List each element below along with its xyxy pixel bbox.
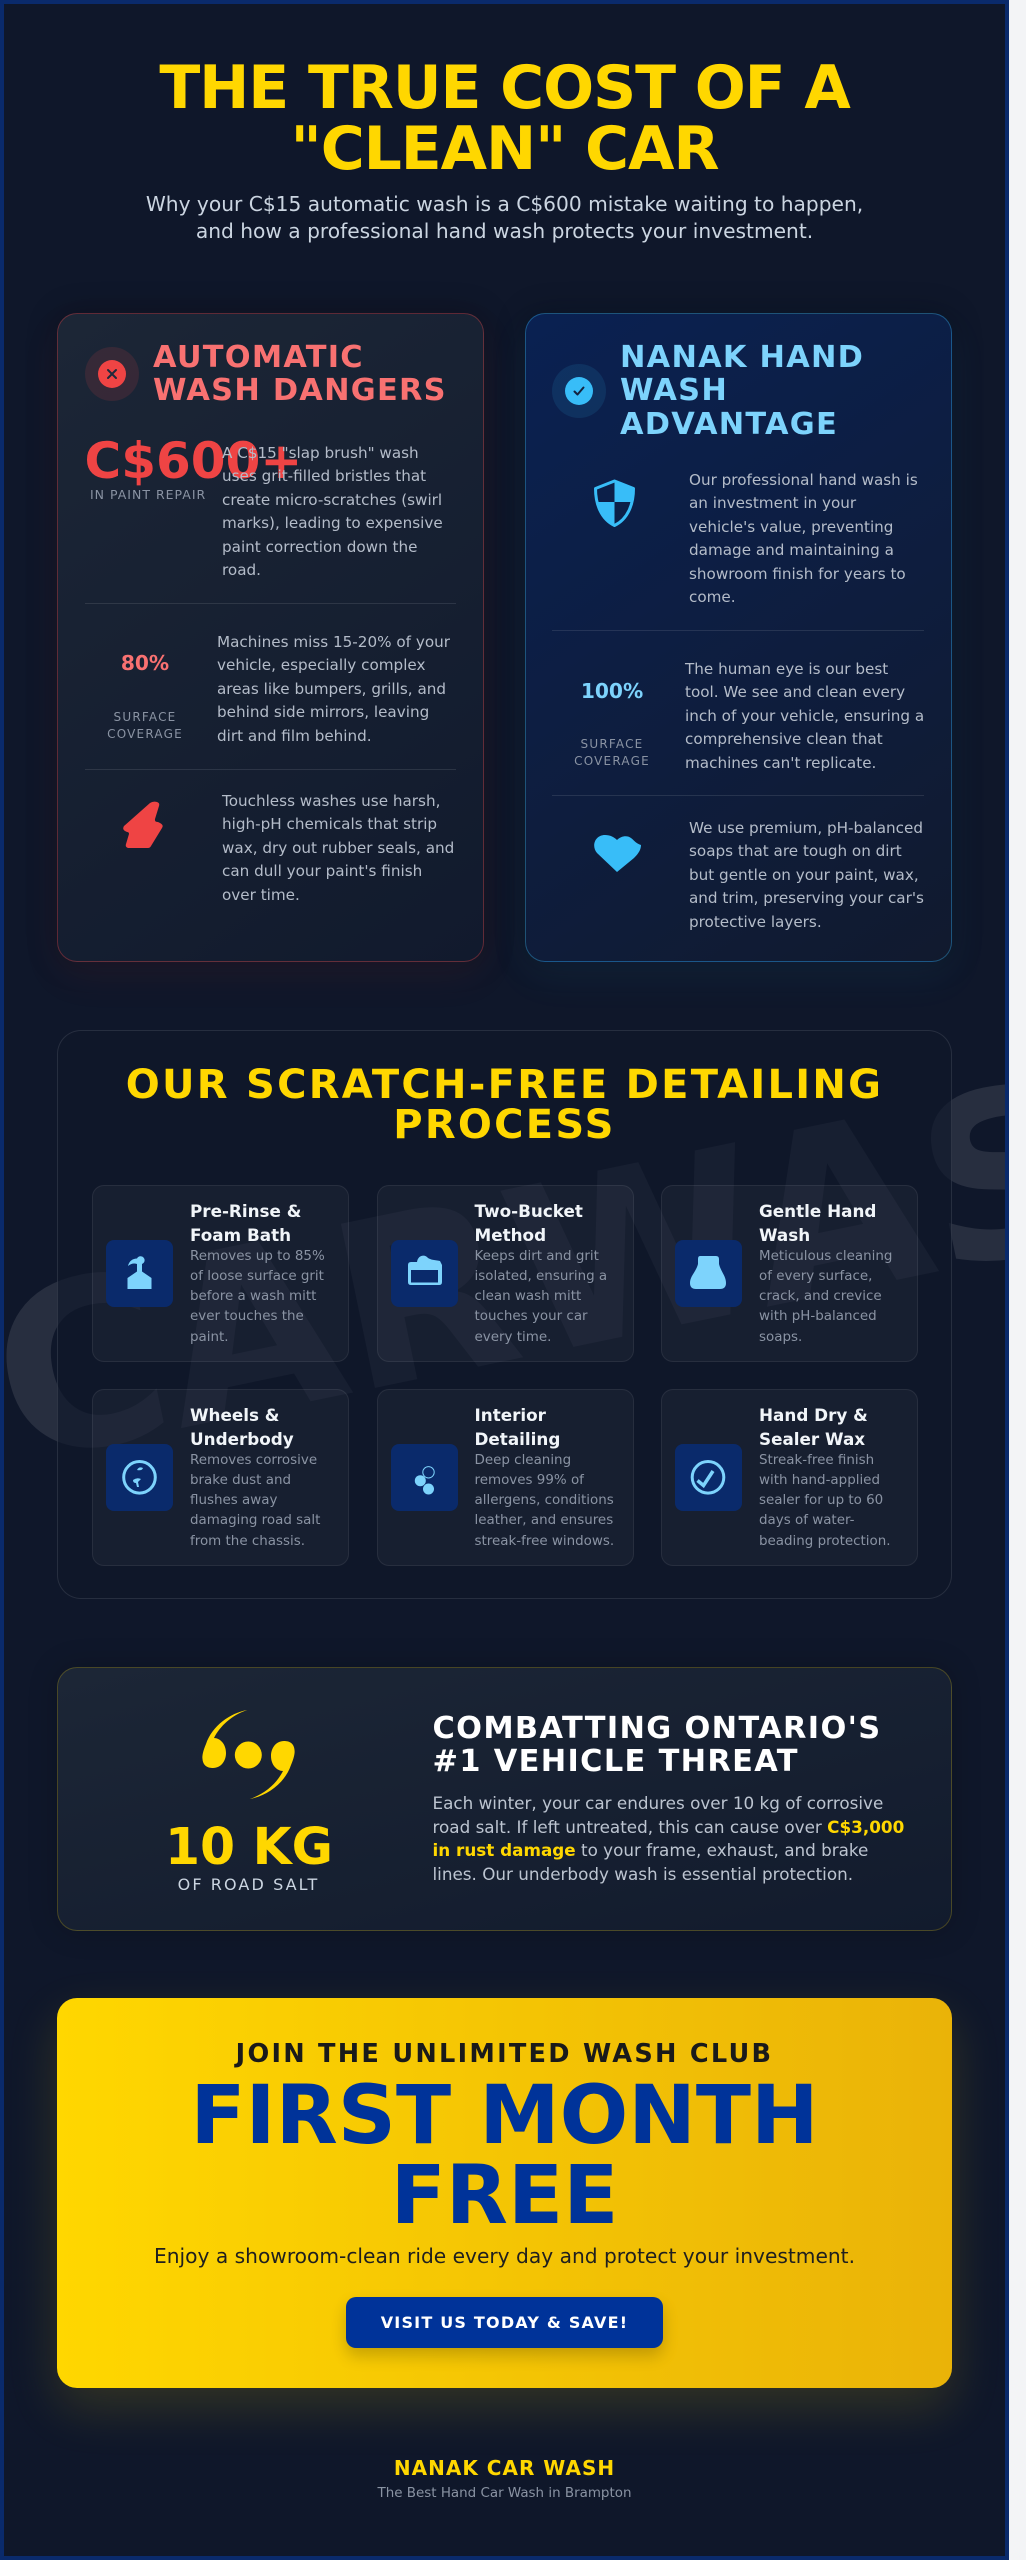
step title: Two-Bucket: [474, 1201, 583, 1221]
step title: [474, 1405, 560, 1449]
stat label: of road salt: OF ROAD SALT: [178, 1875, 319, 1894]
text: ph balanced soaps: protective layers.: [689, 913, 822, 931]
text: machines miss: [217, 632, 450, 745]
step title: Gentle Hand: [759, 1201, 876, 1221]
icon: spray bottle: [106, 1240, 173, 1307]
text: human eye: [684, 660, 924, 772]
text: touchless washes: over time.: [222, 886, 300, 904]
step title: Wash: [759, 1225, 810, 1245]
panel: call to action: [57, 1998, 952, 2388]
title: [159, 52, 850, 184]
cta text: Enjoy a showroom-clean ride every day and protect your investment.: [154, 2244, 855, 2268]
text: ph balanced soaps: and trim, preserving your car's: [689, 889, 924, 907]
text: machines miss: Machines miss 15-20% of your: [217, 632, 450, 650]
step text: isolated, ensuring a: [474, 1269, 607, 1284]
subtitle: and how a professional hand wash protects your investment.: [196, 219, 813, 243]
heading: automatic wash dangers: [153, 340, 447, 408]
text: slap brush: road.: [222, 561, 261, 579]
text: professional hand wash: [689, 470, 918, 606]
text: ph balanced soaps: soaps that are tough on dirt: [689, 842, 902, 860]
step text: [759, 1453, 891, 1549]
cta headline: [190, 2069, 819, 2243]
icon: bucket: [390, 1240, 458, 1307]
text: professional hand wash: damage and maintaining a: [689, 541, 894, 559]
stat label: surface coverage: SURFACE: [114, 710, 176, 724]
step text: from the chassis.: [190, 1534, 305, 1549]
step text: touches your car: [474, 1309, 588, 1324]
step title: Foam Bath: [190, 1225, 291, 1245]
step card: pre-rinse: [92, 1185, 349, 1362]
step title: Method: [474, 1225, 546, 1245]
step title: Wheels &: [190, 1405, 279, 1425]
icon: check ring: [675, 1444, 742, 1511]
step text: of every surface,: [759, 1269, 872, 1284]
cta headline: FIRST MONTH: [190, 2069, 819, 2163]
step text: of loose surface grit: [190, 1269, 324, 1284]
step text: Meticulous cleaning: [759, 1249, 892, 1264]
step text: [474, 1249, 607, 1345]
stat label: surface coverage: COVERAGE: [107, 727, 183, 741]
step text: [474, 1453, 614, 1549]
text: machines miss: vehicle, especially complex: [217, 656, 425, 674]
step text: with pH-balanced: [759, 1309, 877, 1324]
step text: flushes away: [190, 1493, 277, 1508]
subtitle: Why your C$15 automatic wash is a C$600 mistake waiting to happen,: [146, 192, 863, 216]
icon: heart: [594, 835, 641, 872]
step text: before a wash mitt: [190, 1289, 316, 1304]
stat label: surface coverage: SURFACE: [581, 737, 643, 751]
step title: [474, 1201, 583, 1245]
icon: salt swirl: [202, 1710, 295, 1799]
stat: 10 kg: 10 KG: [165, 1817, 333, 1876]
step text: [190, 1249, 325, 1345]
panel: detailing process: [57, 1030, 952, 1599]
heading: scratch-free detailing process: PROCESS: [393, 1102, 616, 1148]
text: touchless washes: Touchless washes use harsh,: [222, 792, 440, 810]
text: rust damage: [432, 1793, 904, 1884]
step text: Keeps dirt and grit: [474, 1249, 599, 1264]
cta button: [346, 2297, 663, 2348]
step text: brake dust and: [190, 1473, 291, 1488]
text: touchless washes: high-pH chemicals that strip: [222, 815, 437, 833]
step title: [190, 1405, 294, 1449]
icon: danger x: [85, 347, 139, 401]
title: "CLEAN" CAR: [291, 114, 718, 184]
step card: wheels: [92, 1389, 349, 1566]
step text: ever touches the: [190, 1309, 304, 1324]
step title: [190, 1201, 301, 1245]
heading: ontario threat: [432, 1711, 882, 1779]
text: professional hand wash: showroom finish for years to: [689, 565, 906, 583]
step title: Hand Dry &: [759, 1405, 868, 1425]
footer tagline: The Best Hand Car Wash in Brampton: [378, 2486, 631, 2501]
icon: wheel: [106, 1444, 173, 1511]
text: human eye: The human eye is our best: [685, 660, 888, 678]
step text: every time.: [474, 1330, 551, 1345]
text: human eye: tool. We see and clean every: [685, 683, 905, 701]
stat label: surface coverage: [574, 737, 650, 768]
step card: two-bucket: [376, 1185, 634, 1362]
text: touchless washes: [222, 792, 454, 904]
text: human eye: machines can't replicate.: [685, 754, 876, 772]
step card: interior: [376, 1389, 634, 1566]
text: human eye: comprehensive clean that: [685, 730, 883, 748]
text: ph balanced soaps: We use premium, pH-balanced: [689, 818, 923, 836]
text: professional hand wash: come.: [689, 588, 736, 606]
text: slap brush: paint correction down the: [222, 538, 417, 556]
step text: Deep cleaning: [474, 1453, 571, 1468]
icon: shield: [594, 480, 635, 527]
text: rust damage: Each winter, your car endures over 10 kg of corrosive: [432, 1793, 883, 1813]
stat: 100%: 100%: [581, 679, 643, 703]
icon: soap bottle: [675, 1240, 742, 1307]
icon: bubbles: [390, 1444, 458, 1511]
subtitle: [146, 192, 863, 243]
heading: scratch-free detailing process: OUR SCRATCH-FREE DETAILING: [126, 1062, 883, 1108]
heading: automatic wash dangers: WASH DANGERS: [153, 373, 447, 408]
step text: streak-free windows.: [474, 1534, 614, 1549]
step card: gentle hand wash: [661, 1185, 918, 1362]
text: rust damage: lines. Our underbody wash is essential protection.: [432, 1864, 853, 1884]
text: machines miss: behind side mirrors, leaving: [217, 703, 429, 721]
panel: automatic wash dangers: [57, 313, 484, 962]
text: professional hand wash: an investment in your: [689, 494, 856, 512]
text: slap brush: uses grit-filled bristles that: [222, 467, 426, 485]
heading: ontario threat: COMBATTING ONTARIO'S: [432, 1711, 882, 1746]
step title: [759, 1201, 876, 1245]
text: professional hand wash: vehicle's value, preventing: [689, 518, 893, 536]
cta headline: FREE: [391, 2149, 618, 2243]
step text: with hand-applied: [759, 1473, 880, 1488]
text: machines miss: areas like bumpers, grills, and: [217, 680, 446, 698]
step title: Interior: [474, 1405, 546, 1425]
text: professional hand wash: Our professional hand wash is: [689, 470, 918, 488]
panel: road salt callout: [57, 1667, 952, 1931]
step text: removes 99% of: [474, 1473, 584, 1488]
step text: leather, and ensures: [474, 1513, 613, 1528]
text: slap brush: create micro-scratches (swirl: [222, 491, 442, 509]
stat: 80%: 80%: [121, 651, 169, 675]
step text: Streak-free finish: [759, 1453, 874, 1468]
footer: [377, 2456, 631, 2501]
icon: check badge: [552, 364, 606, 418]
stat label: in paint repair: IN PAINT REPAIR: [90, 487, 206, 502]
stat label: surface coverage: [107, 710, 183, 741]
step text: [759, 1249, 892, 1345]
step text: Removes up to 85%: [190, 1249, 325, 1264]
step title: Underbody: [190, 1429, 294, 1449]
step card: hand dry: [661, 1389, 918, 1566]
heading: ontario threat: #1 VEHICLE THREAT: [432, 1744, 799, 1779]
step text: crack, and crevice: [759, 1289, 882, 1304]
step text: beading protection.: [759, 1534, 891, 1549]
text: ph balanced soaps: [689, 818, 924, 931]
step text: sealer for up to 60: [759, 1493, 883, 1508]
step text: allergens, conditions: [474, 1493, 614, 1508]
cta button: VISIT US TODAY & SAVE!: [381, 2313, 628, 2332]
cta kicker: JOIN THE UNLIMITED WASH CLUB: [236, 2039, 773, 2069]
step text: damaging road salt: [190, 1513, 320, 1528]
text: ph balanced soaps: but gentle on your paint, wax,: [689, 866, 919, 884]
heading: automatic wash dangers: AUTOMATIC: [153, 340, 364, 375]
text: slap brush: [222, 444, 443, 579]
step text: soaps.: [759, 1330, 802, 1345]
step title: Detailing: [474, 1429, 560, 1449]
step text: clean wash mitt: [474, 1289, 581, 1304]
text: touchless washes: wax, dry out rubber seals, and: [222, 839, 454, 857]
text: machines miss: dirt and film behind.: [217, 727, 372, 745]
stat label: surface coverage: COVERAGE: [574, 754, 650, 768]
heading: nanak hand wash advantage: [620, 340, 864, 442]
step text: Removes corrosive: [190, 1453, 317, 1468]
heading: scratch-free detailing process: [126, 1062, 883, 1148]
text: slap brush: A C$15 "slap brush" wash: [222, 444, 419, 462]
text: slap brush: marks), leading to expensive: [222, 514, 443, 532]
text: rust damage: road salt. If left untreated, this can cause over C$3,000: [432, 1817, 904, 1837]
step text: paint.: [190, 1330, 229, 1345]
icon: bolt: [123, 802, 163, 848]
heading: nanak hand wash advantage: ADVANTAGE: [620, 407, 838, 442]
step text: [190, 1453, 320, 1549]
step title: [759, 1405, 868, 1449]
step title: Pre-Rinse &: [190, 1201, 301, 1221]
stat: C$600+: C$600+: [84, 432, 302, 490]
panel: nanak hand wash advantage: [525, 313, 952, 962]
step text: days of water-: [759, 1513, 854, 1528]
title: THE TRUE COST OF A: [159, 52, 850, 122]
footer brand: NANAK CAR WASH: [394, 2456, 615, 2480]
step title: Sealer Wax: [759, 1429, 865, 1449]
heading: nanak hand wash advantage: NANAK HAND: [620, 340, 864, 375]
text: touchless washes: can dull your paint's finish: [222, 862, 422, 880]
text: human eye: inch of your vehicle, ensuring a: [685, 707, 924, 725]
text: rust damage: in rust damage to your frame, exhaust, and brake: [432, 1840, 868, 1860]
heading: nanak hand wash advantage: WASH: [620, 373, 728, 408]
